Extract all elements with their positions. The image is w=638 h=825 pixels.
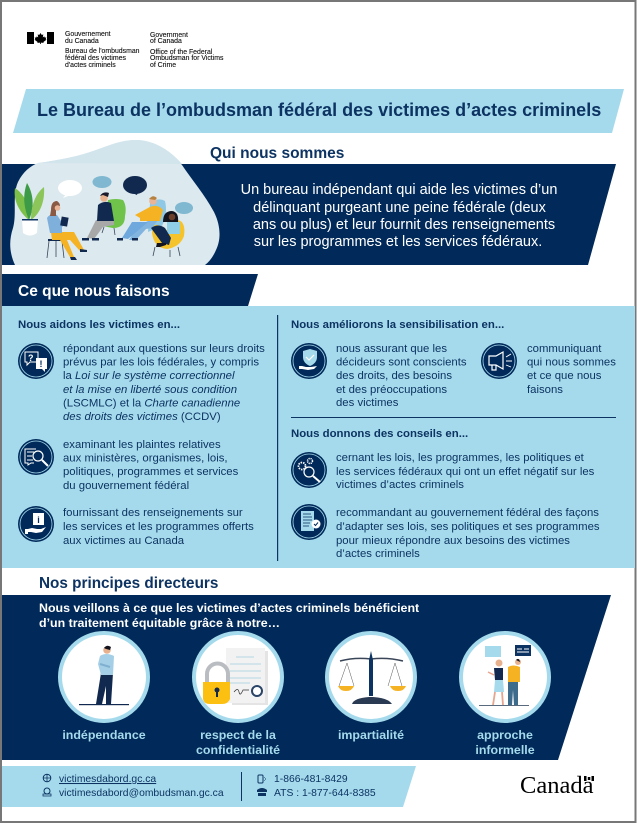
- item: recommending: [291, 504, 600, 560]
- item: questions: [18, 343, 265, 423]
- icon: Canadian flag: [27, 32, 54, 44]
- item: communicating: communiquant: [527, 343, 602, 355]
- icon: standing man: [79, 646, 129, 705]
- item: identifying: victimes d’actes criminels: [336, 479, 464, 491]
- icon: magnifier on document: [18, 439, 54, 475]
- email address: victimesdabord@ombudsman.gc.ca: [59, 788, 224, 799]
- heading: Qui nous sommes: Qui nous sommes: [210, 145, 344, 162]
- item: questions: répondant aux questions sur leurs droits: [63, 343, 265, 355]
- principle: approche informelle: [461, 633, 549, 757]
- heading: Nos principes directeurs: Nos principes directeurs: [39, 575, 218, 592]
- item: information: [18, 506, 254, 547]
- item: complaints: du gouvernement fédéral: [63, 480, 189, 492]
- subheading: Nous donnons des conseils en...: [291, 428, 468, 440]
- principle: approche informelle: informelle: [475, 743, 535, 757]
- icon: two people talking: [479, 645, 531, 706]
- item: complaints: aux ministères, organismes, lois,: [63, 452, 228, 464]
- principle: confidentialité: confidentialité: [196, 743, 280, 757]
- icon: hand with information: [18, 506, 54, 542]
- item: decision makers: décideurs sont conscients: [336, 356, 467, 368]
- icon: question and exclamation bubbles: ?: [28, 353, 34, 363]
- icon: scales of justice: [338, 651, 406, 704]
- item: information: aux victimes au Canada: [63, 535, 185, 547]
- principle: indépendance: indépendance: [62, 728, 146, 742]
- plant: [15, 183, 44, 236]
- English signature: [150, 32, 224, 69]
- icon: TTY: [257, 788, 267, 796]
- intro text: d’un traitement équitable grâce à notre…: [39, 616, 280, 630]
- item: questions: la Loi sur le système correctionnel: [63, 370, 235, 382]
- item: questions: des droits des victimes (CCDV): [63, 411, 221, 423]
- item: recommending: recommandant au gouvernement fédéral des façons: [336, 507, 599, 519]
- column: Nous aidons: [18, 319, 265, 547]
- panel: Qui nous sommes: [2, 140, 616, 265]
- phone number: 1-866-481-8429: [274, 774, 348, 785]
- French signature: du Canada: [65, 38, 99, 45]
- item: complaints: [18, 439, 239, 492]
- icon: question and exclamation bubbles: [18, 343, 54, 379]
- statement text: [241, 182, 557, 250]
- principle: impartialité: impartialité: [338, 728, 404, 742]
- item: questions: et la mise en liberté sous condition: [63, 384, 237, 396]
- English signature: Government: [150, 32, 188, 39]
- footer contact band: [2, 766, 416, 807]
- item: communicating: faisons: [527, 384, 563, 396]
- intro text: Nous veillons à ce que les victimes d’actes criminels bénéficient: [39, 601, 419, 615]
- title: Le Bureau de l’ombudsman fédéral des victimes d’actes criminels: [37, 100, 601, 120]
- heading: Ce que nous faisons: Ce que nous faisons: [18, 283, 170, 300]
- intro text: [39, 601, 419, 630]
- icon: question and exclamation bubbles: !: [40, 359, 42, 369]
- English signature: of Crime: [150, 62, 176, 69]
- statement text: sur les programmes et les services fédéraux.: [254, 234, 542, 250]
- principle: impartialité: [327, 633, 415, 742]
- person: man on green chair: [82, 192, 126, 240]
- statement text: délinquant purgeant une peine fédérale (deux: [253, 200, 547, 216]
- subheading: Nous améliorons la sensibilisation en...: [291, 319, 504, 331]
- item: decision makers: des victimes: [336, 397, 399, 409]
- item: communicating: et ce que nous: [527, 370, 602, 382]
- French signature: [65, 31, 140, 69]
- English signature: Ombudsman for Victims: [150, 55, 224, 62]
- icon: megaphone: [481, 343, 517, 379]
- item: complaints: examinant les plaintes relatives: [63, 439, 221, 451]
- illustration: support group: [10, 140, 220, 265]
- item: recommending: d’actes criminels: [336, 548, 420, 560]
- TTY number: ATS : 1-877-644-8385: [274, 788, 376, 799]
- icon: email: [43, 788, 51, 796]
- principle: confidentialité: [194, 633, 282, 757]
- government header: [27, 31, 224, 69]
- icon: document with check: [291, 504, 327, 540]
- item: questions: (LSCMLC) et la Charte canadienne: [63, 398, 240, 410]
- statement text: ans ou plus) et leur fournit des renseignements: [253, 217, 555, 233]
- French signature: Bureau de l'ombudsman: [65, 48, 140, 55]
- person: woman on yellow chair: [151, 211, 184, 257]
- item: decision makers: nous assurant que les: [336, 343, 447, 355]
- item: identifying: [291, 452, 595, 491]
- title banner: [13, 89, 624, 133]
- item: communicating: [481, 343, 616, 396]
- item: identifying: cernant les lois, les programmes, les politiques et: [336, 452, 585, 464]
- panel: Ce que nous faisons: [2, 274, 635, 568]
- icon: gears and magnifier: [291, 452, 327, 488]
- item: identifying: les services fédéraux qui ont un effet négatif sur les: [336, 466, 595, 478]
- icon: phone: [258, 775, 266, 783]
- French signature: d'actes criminels: [65, 62, 116, 69]
- Canada wordmark: Canada: [520, 772, 594, 799]
- statement text: Un bureau indépendant qui aide les victimes d’un: [241, 182, 557, 198]
- speech bubbles: [58, 176, 193, 214]
- item: recommending: d’adapter ses lois, ses politiques et ses programmes: [336, 521, 600, 533]
- panel: Nos principes directeurs: [2, 595, 611, 760]
- item: complaints: politiques, programmes et services: [63, 466, 239, 478]
- person: man on blue chair: [117, 196, 166, 240]
- icon: globe: [43, 774, 51, 782]
- item: questions: prévus par les lois fédérales, y compris: [63, 356, 259, 368]
- item: information: fournissant des renseignements sur: [63, 507, 243, 519]
- item: information: les services et les programmes offerts: [63, 521, 254, 533]
- icon: hand with information: i: [37, 515, 40, 525]
- item: decision makers: et des préoccupations: [336, 384, 447, 396]
- French signature: fédéral des victimes: [65, 55, 126, 62]
- item: recommending: pour mieux répondre aux besoins des victimes: [336, 535, 570, 547]
- English signature: Office of the Federal: [150, 49, 213, 56]
- item: decision makers: des droits, des besoins: [336, 370, 452, 382]
- French signature: Gouvernement: [65, 31, 111, 38]
- principle: indépendance: [60, 633, 148, 742]
- heading: Ce que nous faisons: [2, 274, 258, 306]
- website link: victimesdabord.gc.ca: [59, 774, 156, 785]
- person: woman with tablet: [47, 201, 87, 260]
- icon: shield on hand: [291, 343, 327, 379]
- principle: confidentialité: respect de la: [200, 728, 276, 742]
- subheading: Nous aidons les victimes en...: [18, 319, 180, 331]
- item: decision makers: [291, 343, 467, 409]
- column: Nous améliorons: [291, 319, 616, 560]
- English signature: of Canada: [150, 38, 182, 45]
- principle: approche informelle: approche: [477, 728, 533, 742]
- item: communicating: qui nous sommes: [527, 356, 616, 368]
- icon: padlock and document: [203, 648, 268, 705]
